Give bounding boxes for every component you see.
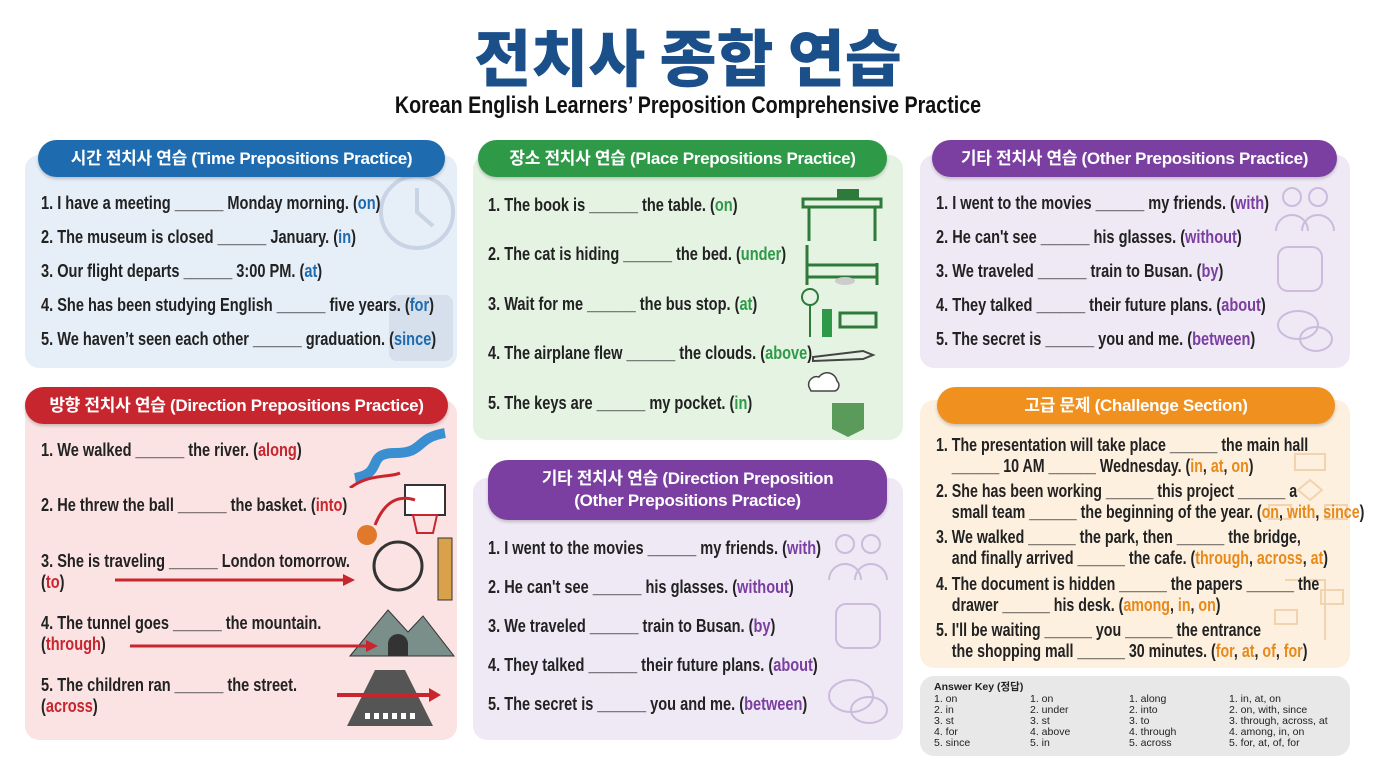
panel: challenge (920, 400, 1350, 668)
icon: train (835, 603, 881, 649)
icon: people (828, 534, 888, 580)
panel: other prepositions right: 4. They talked ______ their future plans. (about) (936, 295, 1266, 315)
panel: other prepositions middle: 2. He can't see ______ his glasses. (without) (488, 577, 794, 597)
icon: table (802, 189, 882, 241)
icon: London (372, 538, 452, 600)
answer key: 4. among, in, on (1229, 726, 1304, 738)
panel: direction prepositions: 5. The children ran ______ the street. (41, 675, 297, 695)
panel: time prepositions: 1. I have a meeting ______ Monday morning. (on) (41, 193, 380, 213)
panel: other prepositions middle: 1. I went to the movies ______ my friends. (with) (488, 538, 821, 558)
icon: clock (379, 176, 455, 250)
panel: challenge: small team ______ the beginning of the year. (on, with, since) (952, 502, 1364, 522)
heading: time: 시간 전치사 연습 (Time Prepositions Practice) (71, 149, 412, 168)
panel: challenge: 1. The presentation will take place ______ the main hall (936, 435, 1308, 455)
heading: direction: 방향 전치사 연습 (Direction Prepositions Practice) (49, 396, 424, 415)
answer key: 2. into (1129, 704, 1158, 716)
answer key: 3. st (1030, 715, 1050, 727)
answer key: 3. st (934, 715, 954, 727)
answer key: 4. for (934, 726, 958, 738)
panel: time prepositions: 4. She has been studying English ______ five years. (for) (41, 295, 434, 315)
other questions (middle) (488, 538, 821, 714)
panel: place prepositions: 3. Wait for me ______ the bus stop. (at) (488, 294, 757, 314)
panel: direction prepositions: 1. We walked ______ the river. (along) (41, 440, 302, 460)
heading: other right (932, 140, 1337, 177)
icon: bus stop (801, 288, 878, 337)
panel: place prepositions: 4. The airplane flew ______ the clouds. (above) (488, 343, 812, 363)
panel: challenge: 4. The document is hidden ______ the papers ______ the (936, 574, 1319, 594)
answer key: 3. through, across, at (1229, 715, 1328, 727)
icon: people (1275, 187, 1335, 231)
panel: other prepositions right (920, 155, 1350, 368)
place questions (488, 195, 812, 413)
panel: other prepositions middle: 4. They talked ______ their future plans. (about) (488, 655, 818, 675)
panel: place prepositions: 1. The book is ______ the table. (on) (488, 195, 738, 215)
answer key: 2. under (1030, 704, 1069, 716)
arrow: to (115, 574, 355, 586)
heading: challenge (937, 387, 1335, 424)
challenge questions (936, 435, 1364, 661)
panel: direction prepositions: 2. He threw the ball ______ the basket. (into) (41, 495, 347, 515)
heading: other right: 기타 전치사 연습 (Other Prepositions Practice) (961, 149, 1308, 168)
panel: time prepositions: 3. Our flight departs ______ 3:00 PM. (at) (41, 261, 322, 281)
icon: chat (1277, 310, 1333, 352)
icon: flowchart (1268, 453, 1348, 640)
panel: challenge: drawer ______ his desk. (among, in, on) (952, 595, 1221, 615)
answer key: 3. to (1129, 715, 1149, 727)
direction questions (41, 440, 350, 716)
panel: place prepositions (473, 155, 903, 440)
icon: chat (828, 679, 888, 724)
panel: direction prepositions (25, 400, 457, 740)
heading: direction (25, 387, 448, 424)
answer key (920, 676, 1350, 756)
icon: basketball (357, 484, 446, 545)
panel: other prepositions right: 3. We traveled ______ train to Busan. (by) (936, 261, 1223, 281)
panel: place prepositions: 5. The keys are ______ my pocket. (in) (488, 393, 752, 413)
icon: street (347, 670, 433, 726)
icon: mountain (349, 609, 455, 656)
panel: challenge: and finally arrived ______ the cafe. (through, across, at) (952, 548, 1328, 568)
icon: pocket (832, 403, 864, 437)
panel: other prepositions right: 5. The secret is ______ you and me. (between) (936, 329, 1255, 349)
heading: place (478, 140, 887, 177)
icon: river (349, 428, 446, 488)
answer key: 2. in (934, 704, 954, 716)
panel: time prepositions: 2. The museum is closed ______ January. (in) (41, 227, 356, 247)
other questions (right) (936, 193, 1269, 349)
panel: challenge: the shopping mall ______ 30 minutes. (for, at, of, for) (952, 641, 1307, 661)
arrow: through (130, 640, 378, 652)
panel: challenge: 5. I'll be waiting ______ you ______ the entrance (936, 620, 1261, 640)
heading: other middle: 기타 전치사 연습 (Direction Preposition (542, 469, 833, 488)
answer key: 4. above (1030, 726, 1070, 738)
panel: direction prepositions: (across) (41, 696, 98, 716)
panel: place prepositions: 2. The cat is hiding ______ the bed. (under) (488, 244, 786, 264)
answer key: 5. for, at, of, for (1229, 737, 1300, 749)
answer key: 1. on (934, 693, 957, 705)
answer key: 5. across (1129, 737, 1172, 749)
panel: other prepositions right: 1. I went to the movies ______ my friends. (with) (936, 193, 1269, 213)
panel: direction prepositions: 4. The tunnel goes ______ the mountain. (41, 613, 321, 633)
icon: calendar (389, 295, 453, 361)
heading: challenge: 고급 문제 (Challenge Section) (1024, 396, 1248, 415)
heading: place: 장소 전치사 연습 (Place Prepositions Practice) (509, 149, 856, 168)
panel: direction prepositions: 3. She is traveling ______ London tomorrow. (41, 551, 350, 571)
panel: challenge: 2. She has been working ______ this project ______ a (936, 481, 1297, 501)
panel: other prepositions middle: 3. We traveled ______ train to Busan. (by) (488, 616, 775, 636)
heading: time (38, 140, 445, 177)
title: 전치사 종합 연습 (474, 9, 902, 99)
panel: time prepositions: 5. We haven’t seen each other ______ graduation. (since) (41, 329, 436, 349)
answer key: 1. in, at, on (1229, 693, 1281, 705)
answer key: 1. on (1030, 693, 1053, 705)
answer key: 5. in (1030, 737, 1050, 749)
answer key: Answer Key (정답) (934, 681, 1023, 693)
panel: other prepositions right: 2. He can't see ______ his glasses. (without) (936, 227, 1242, 247)
heading: other middle (488, 460, 887, 520)
icon: airplane (808, 350, 876, 392)
answer key: 1. along (1129, 693, 1166, 705)
arrow: across (337, 688, 441, 702)
time questions (41, 193, 436, 349)
panel: other prepositions middle (473, 478, 903, 740)
panel: challenge: 3. We walked ______ the park, then ______ the bridge, (936, 527, 1301, 547)
answer key: 5. since (934, 737, 970, 749)
panel: time prepositions (25, 155, 457, 368)
panel: other prepositions middle: 5. The secret is ______ you and me. (between) (488, 694, 807, 714)
answer key: 4. through (1129, 726, 1176, 738)
panel: direction prepositions: (through) (41, 634, 106, 654)
heading: other middle: (Other Prepositions Practice) (574, 491, 801, 510)
icon: bed (806, 245, 878, 285)
subtitle: Korean English Learners’ Preposition Comprehensive Practice (395, 92, 981, 119)
icon: train (1277, 246, 1323, 292)
panel: direction prepositions: (to) (41, 572, 64, 592)
answer key: 2. on, with, since (1229, 704, 1307, 716)
panel: challenge: ______ 10 AM ______ Wednesday. (in, at, on) (952, 456, 1254, 476)
